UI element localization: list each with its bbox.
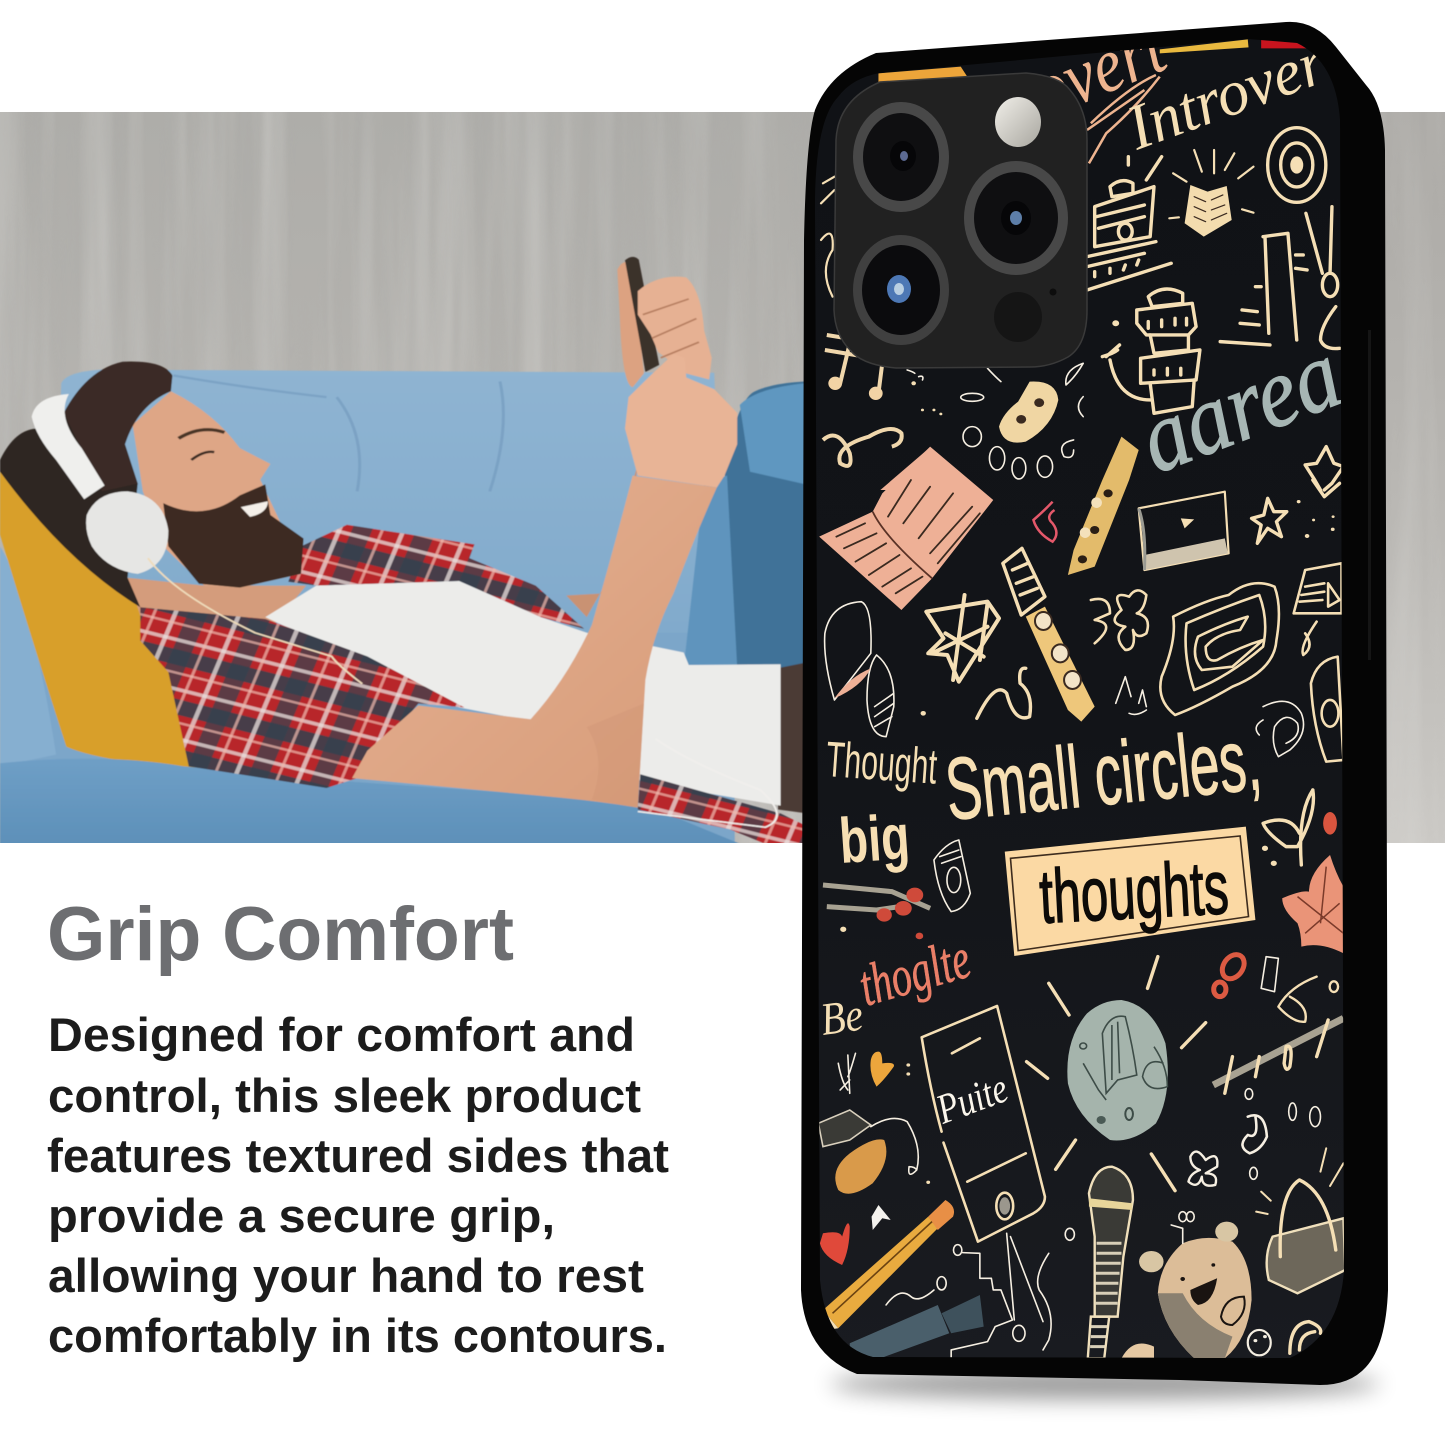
sofa right arm: [724, 381, 837, 672]
red leaf: [1323, 812, 1337, 835]
description paragraph: Designed for comfort and: [48, 1008, 635, 1061]
dots: [921, 500, 1335, 716]
concrete wall: [0, 112, 830, 843]
small dots: [911, 320, 1119, 415]
lidar sensor: [994, 292, 1042, 342]
plaid shirt tail: [637, 774, 802, 843]
small circle button fill: [999, 1197, 1010, 1215]
lens bottom left: [853, 235, 949, 345]
wires: [886, 1233, 1051, 1358]
screen background: [810, 30, 1350, 1365]
elbow shade: [587, 704, 644, 808]
pink book upper: [880, 447, 980, 490]
ring and swirl: [818, 1110, 930, 1194]
bubble: [825, 602, 894, 737]
sofa left arm: [0, 546, 56, 766]
small circles: [1245, 1089, 1320, 1179]
red link: [1214, 952, 1248, 997]
phone case: [801, 2, 1388, 1385]
dark blue marker: [850, 1295, 984, 1358]
orange pencil: [823, 1200, 954, 1330]
white cable: [637, 804, 779, 829]
handwritten text: big: big: [837, 800, 912, 877]
face circle: [1248, 1330, 1271, 1355]
top colour blocks: [878, 38, 1309, 88]
lens top left: [853, 102, 949, 212]
white t-shirt: [265, 581, 781, 806]
butterfly: [1188, 1152, 1217, 1186]
beard: [163, 484, 304, 588]
ladder doodle: [1220, 207, 1340, 349]
description paragraph: [47, 1008, 669, 1362]
plaid shirt upper: [288, 525, 584, 629]
grey rock: [1067, 1000, 1168, 1140]
face shape doodle: [999, 382, 1058, 443]
neck: [128, 578, 306, 623]
red squiggle: [1033, 502, 1056, 542]
sofa arm highlight: [739, 383, 804, 484]
scratchy line: [1213, 1018, 1343, 1085]
red roses: [877, 888, 923, 939]
handwritten text: aarea: aarea: [1124, 317, 1355, 495]
dots: [840, 846, 1277, 932]
pink leaf: [834, 668, 871, 698]
sofa fold shadows: [173, 376, 503, 491]
camera module: [834, 73, 1087, 368]
white arrow: [872, 1205, 891, 1230]
description paragraph: features textured sides that: [47, 1129, 669, 1182]
left edge lines: [821, 177, 834, 297]
description paragraph: allowing your hand to rest: [48, 1249, 644, 1302]
sofa back: [60, 369, 716, 634]
microphone dot: [1050, 288, 1056, 296]
circles: [1013, 1228, 1074, 1341]
sofa inner side: [684, 476, 737, 668]
cream mitten: [1121, 1343, 1154, 1358]
mouth: [241, 501, 268, 517]
man and sofa illustration: [0, 257, 837, 850]
flute: [1003, 548, 1095, 722]
bag: [1256, 1148, 1345, 1293]
behind-phone fingers: [617, 262, 644, 387]
flash: [995, 97, 1041, 147]
can icon: [934, 840, 970, 912]
tv icon right: [1294, 563, 1342, 655]
wall strip right of phone: [1375, 112, 1445, 843]
handwritten text: thoglte: thoglte: [852, 925, 977, 1018]
doodle artwork middle: [819, 437, 1343, 956]
doodle artwork upper: [821, 38, 1343, 490]
arch bottom right: [1290, 1322, 1321, 1353]
small star: [1252, 498, 1287, 543]
gripping fingers: [638, 277, 712, 379]
target icon: [1268, 128, 1326, 202]
side button: [1368, 330, 1371, 660]
face: [133, 391, 301, 588]
module body: [834, 73, 1087, 368]
handwritten text: Be: Be: [817, 989, 866, 1045]
doodle artwork lower: [818, 952, 1345, 1358]
coil icon: [1256, 701, 1304, 757]
printed screen area: [810, 2, 1355, 1365]
bear face: [1139, 1222, 1252, 1358]
handwritten text: Thought: Thought: [824, 731, 939, 795]
description paragraph: comfortably in its contours.: [48, 1309, 667, 1362]
yellow pillow: [0, 472, 199, 768]
plaid sleeve: [140, 607, 464, 788]
arm: [352, 476, 717, 808]
book icon with rays: [1169, 150, 1253, 237]
eyebrow: [179, 430, 224, 438]
briefcase icon: [1087, 157, 1171, 290]
case body: [801, 22, 1388, 1385]
red heart: [820, 1223, 850, 1265]
ribbon: [1087, 75, 1160, 163]
phone drop shadow: [830, 1369, 1380, 1399]
maze blob: [1160, 583, 1279, 715]
crossed out scribbles: [823, 885, 930, 910]
description paragraph: control, this sleek product: [48, 1069, 641, 1122]
headphone cable: [148, 558, 362, 684]
hand: [625, 354, 737, 487]
pair of loops: [1242, 1115, 1267, 1153]
eye: [191, 452, 214, 460]
description paragraph: provide a secure grip,: [48, 1189, 555, 1242]
far arm: [566, 464, 638, 617]
headphone band: [32, 394, 105, 499]
battery doodle: [1261, 957, 1278, 992]
hair top: [64, 362, 172, 491]
legs: [778, 662, 803, 814]
heading: Grip Comfort: [47, 892, 514, 977]
knot: [1278, 977, 1338, 1022]
lifestyle photo: man on sofa: [0, 112, 837, 850]
Aa glyphs: [1116, 677, 1146, 714]
bottle right: [1311, 657, 1343, 762]
bear bow and antenna: [1171, 1212, 1194, 1243]
pink open book: [819, 447, 993, 610]
small phone: [625, 257, 659, 372]
headphone ear cup: [86, 491, 168, 574]
microphone: [1088, 1167, 1133, 1358]
wave: [977, 668, 1030, 718]
left small icons: [838, 1052, 910, 1093]
handwritten text: thoughts: thoughts: [1037, 845, 1231, 940]
pink flower: [1282, 855, 1343, 953]
music notes: [825, 335, 883, 400]
tablet icon: [1139, 492, 1229, 570]
house shape: [926, 595, 999, 682]
sunburst rays: [1027, 957, 1206, 1191]
hair back: [0, 413, 140, 607]
plant: [1263, 790, 1313, 865]
scribble notes: [1225, 1020, 1328, 1093]
flower veins: [1298, 867, 1343, 933]
handwritten text: Puite: Puite: [930, 1066, 1014, 1134]
handwritten text: Introver: Introver: [1117, 26, 1335, 163]
flower: [1091, 590, 1148, 650]
phone doodle: [922, 1006, 1045, 1242]
upper star piece: [1313, 480, 1340, 497]
yellow pencil: [1068, 437, 1139, 575]
sofa base fill: [27, 661, 736, 842]
label box: [1005, 827, 1255, 956]
thermos icon: [1102, 289, 1200, 413]
sofa seat: [0, 759, 755, 850]
finger separators: [643, 299, 699, 358]
lens right: [964, 161, 1068, 275]
star upper: [1305, 447, 1343, 490]
squiggle: [823, 429, 902, 466]
small symbols: [907, 363, 1083, 479]
